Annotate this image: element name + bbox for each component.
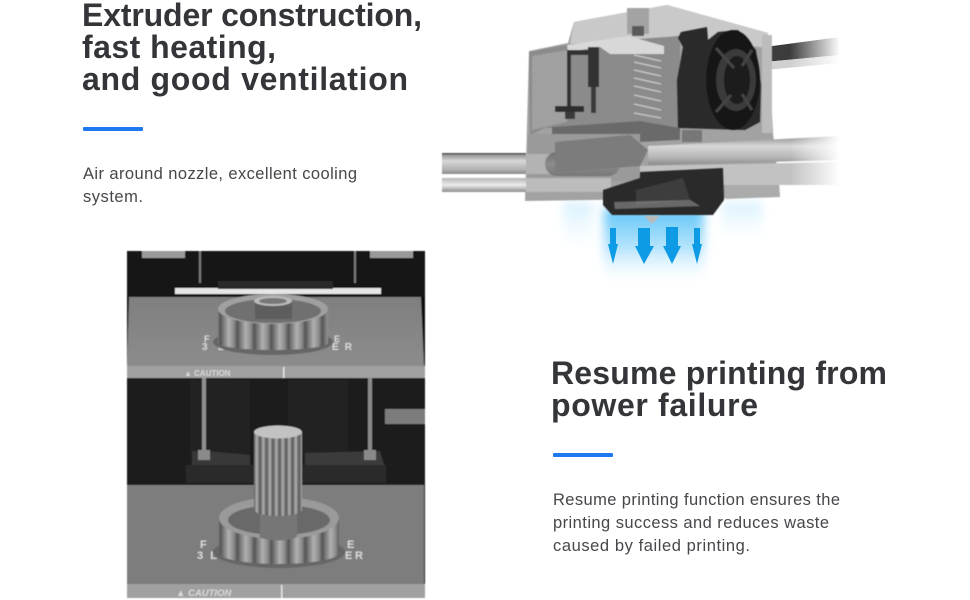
photo bottom: print resumed: E	[347, 539, 354, 551]
text block: extruder description: system.	[83, 188, 143, 206]
rear rail	[765, 37, 840, 62]
illustration: extruder with cooling airflow	[442, 5, 856, 280]
airflow glow	[563, 202, 762, 280]
text block: resume description: caused by failed printing.	[553, 537, 750, 555]
photo bottom: print resumed: F	[200, 539, 207, 551]
accent bar: extruder section	[83, 127, 143, 131]
cooling fan	[677, 27, 761, 130]
text block: resume description	[553, 491, 840, 555]
heading: extruder construction	[82, 0, 422, 97]
extruder housing	[525, 5, 780, 201]
text block: resume description: printing success and reduces waste	[553, 514, 829, 532]
heading: extruder construction: and good ventilation	[82, 61, 408, 97]
right fade	[790, 20, 840, 195]
photo top: print before power failure: 3L	[202, 342, 224, 353]
heading: resume printing	[551, 355, 887, 423]
photo top: print before power failure: ▲ CAUTION	[184, 369, 231, 378]
photo top: print before power failure	[127, 251, 425, 378]
photo bottom: print resumed	[127, 378, 425, 599]
airflow arrows	[608, 227, 702, 264]
text block: resume description: Resume printing function ensures the	[553, 491, 840, 509]
text block: extruder description: Air around nozzle, excellent cooling	[83, 165, 357, 183]
photo bottom: print resumed: ER	[345, 550, 363, 562]
text block: extruder description	[83, 165, 357, 206]
heading: extruder construction: fast heating,	[82, 29, 276, 65]
hot end	[603, 168, 724, 224]
photo bottom: print resumed: 3L	[197, 550, 217, 562]
accent bar: resume section	[553, 453, 613, 457]
photo bottom: print resumed: ▲ CAUTION	[176, 588, 232, 599]
photo: resume printing comparison	[127, 251, 425, 599]
photo top: print before power failure: ER	[332, 342, 353, 353]
photo top: print before power failure: F	[204, 334, 210, 344]
linear rods	[442, 130, 840, 192]
heading: resume printing: Resume printing from	[551, 355, 887, 391]
heading: resume printing: power failure	[551, 387, 758, 423]
photo top: print before power failure: E	[334, 334, 340, 344]
